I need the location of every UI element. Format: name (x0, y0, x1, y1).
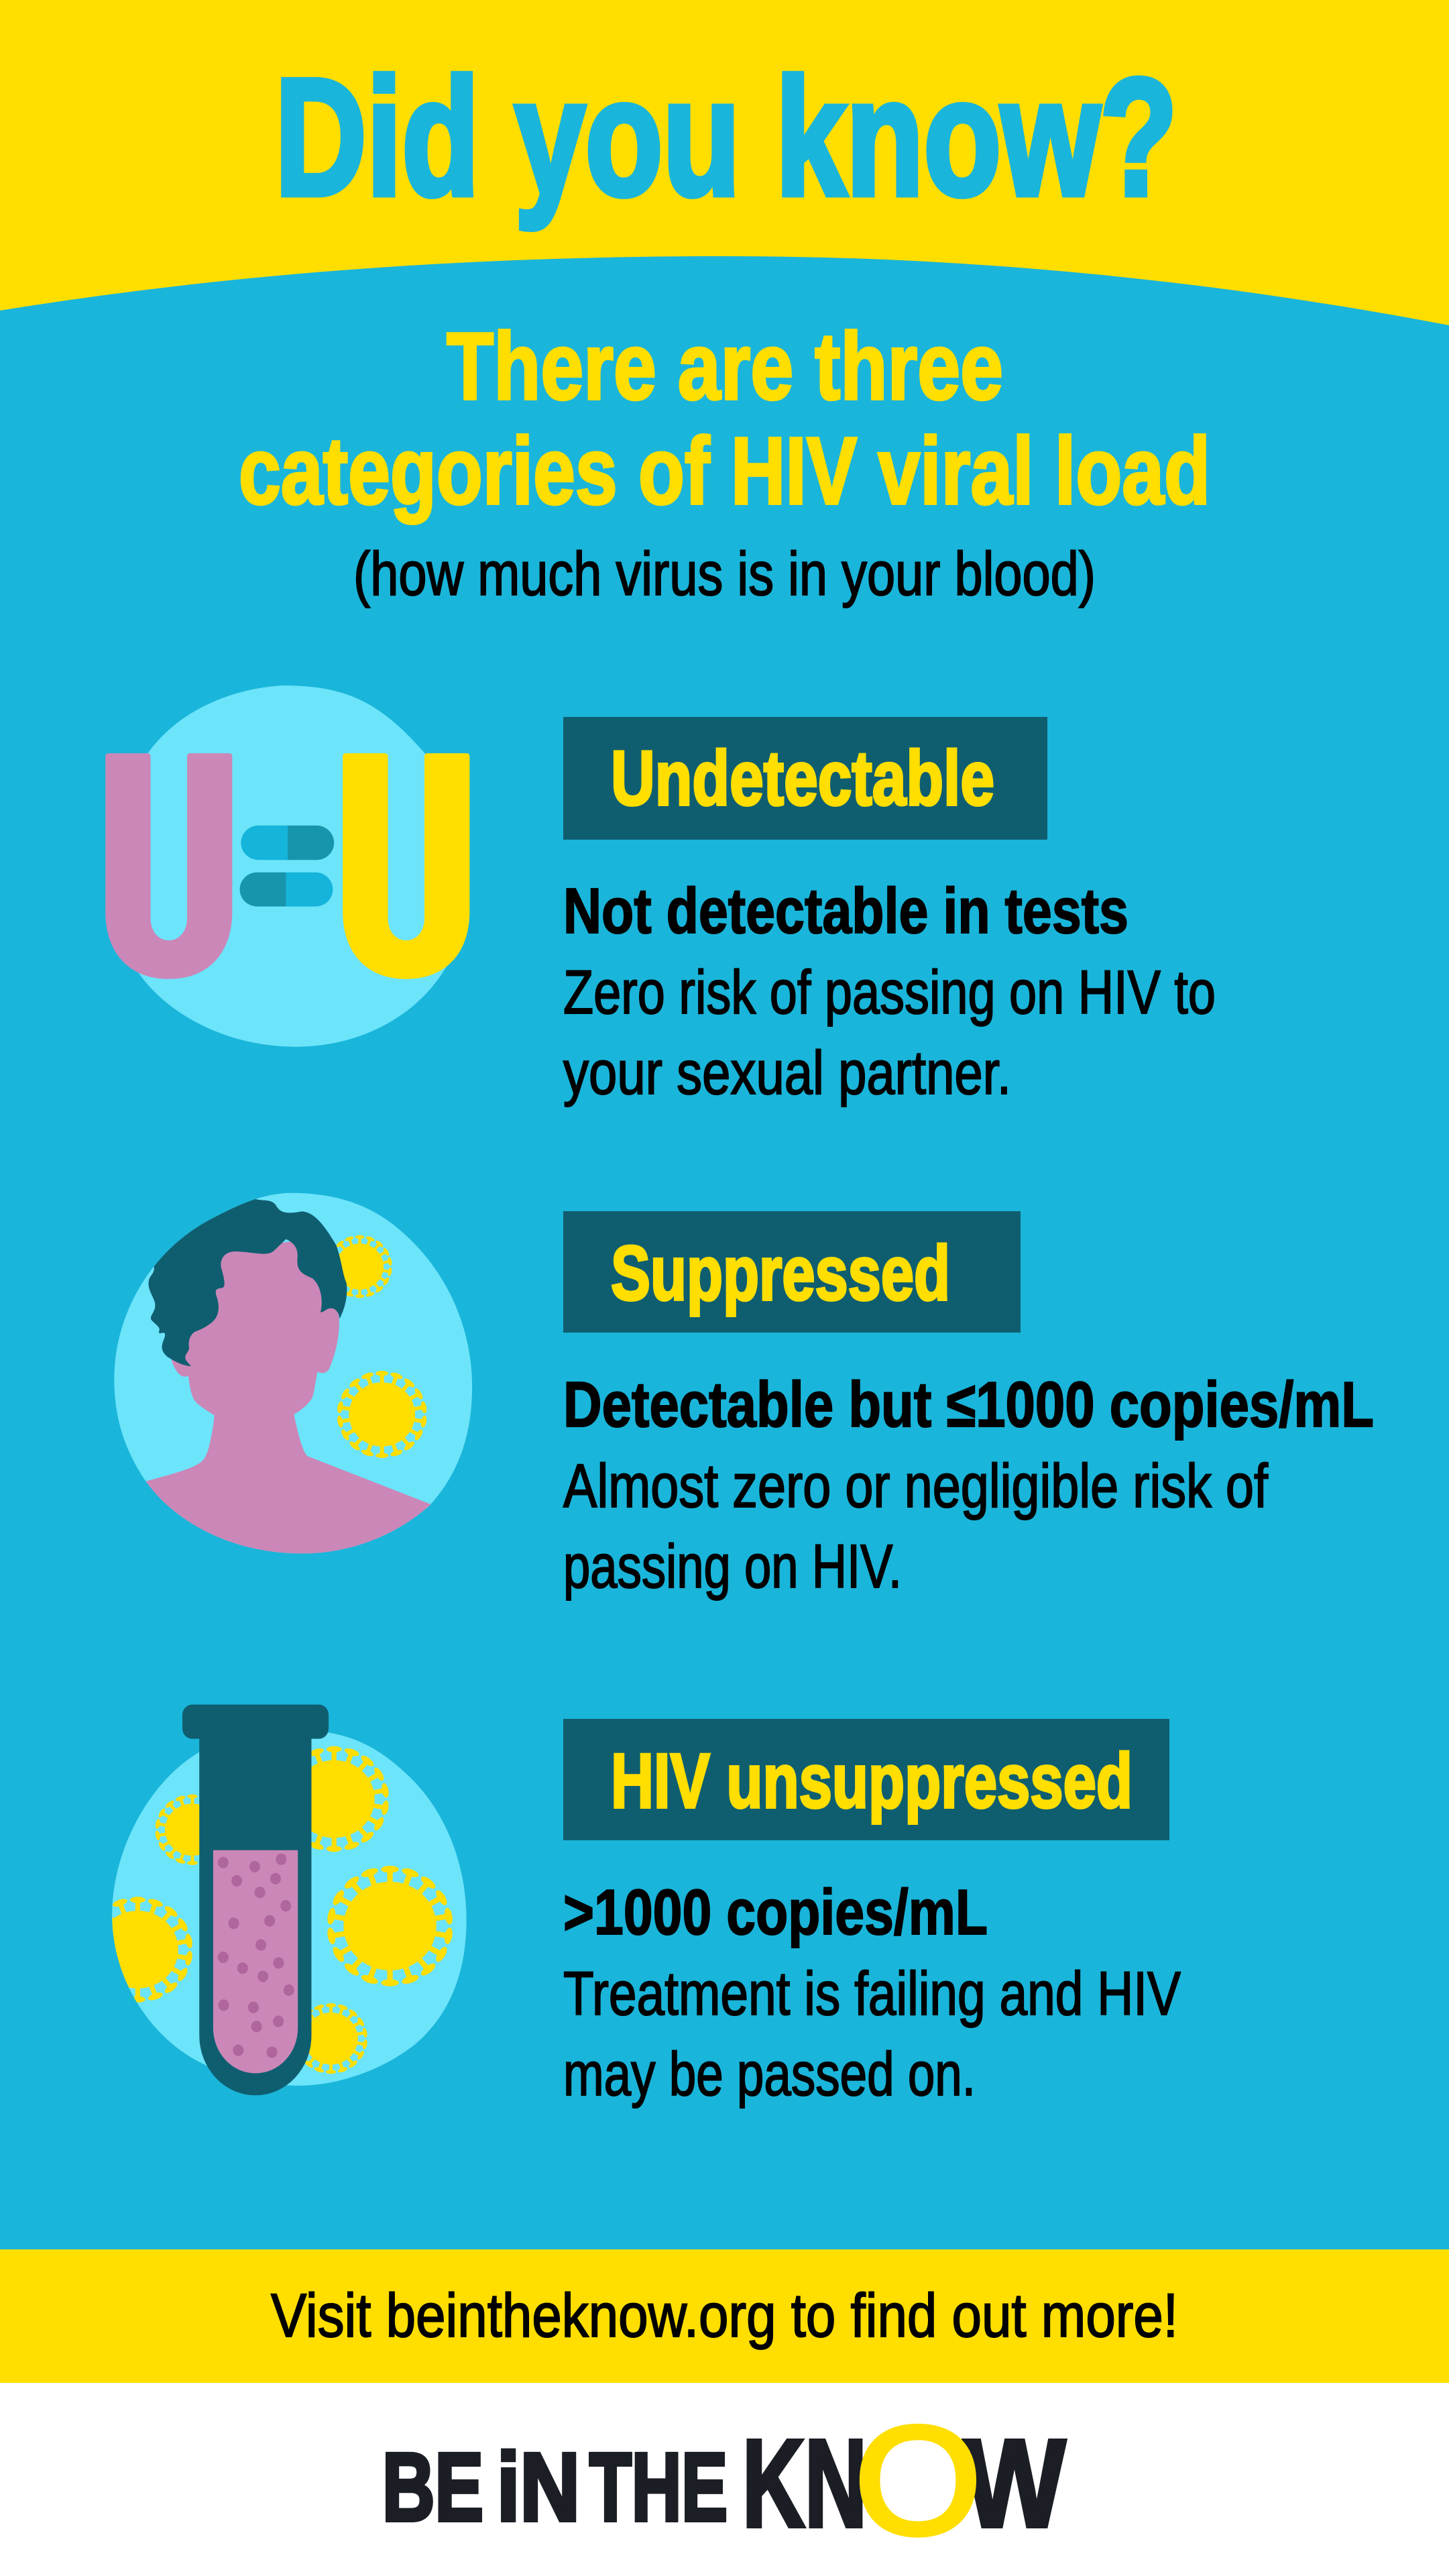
footer band with call to action: Visit beintheknow.org to find out more! (271, 2282, 1178, 2350)
logo band (0, 2383, 1449, 2576)
logo: Be in the Know: KN (742, 2414, 867, 2553)
text: Suppressed description: Almost zero or negligible risk of (563, 1452, 1268, 1520)
logo: Be in the Know: THE (589, 2433, 728, 2541)
text: HIV unsuppressed description: Treatment is failing and HIV (563, 1960, 1181, 2028)
logo: Be in the Know: W (964, 2414, 1065, 2553)
text: HIV unsuppressed description: >1000 copies/mL (563, 1877, 988, 1948)
icon: person with virus (114, 1193, 472, 1559)
icon: U=U (105, 685, 469, 1047)
logo: Be in the Know (382, 2394, 1065, 2567)
icon: test tube with virus (82, 1705, 467, 2095)
text: Undetectable description: your sexual partner. (563, 1039, 1011, 1107)
subheading: (how much virus is in your blood) (353, 540, 1096, 608)
text: Undetectable description: Zero risk of passing on HIV to (563, 958, 1216, 1027)
label box: Undetectable: Undetectable (611, 736, 994, 822)
footer band with call to action (0, 2249, 1449, 2383)
label box: Suppressed (563, 1211, 1021, 1333)
text: Suppressed description: passing on HIV. (563, 1532, 902, 1601)
title: Did you know? (275, 44, 1177, 230)
logo: Be in the Know: O (854, 2394, 982, 2567)
text: Undetectable description: Not detectable in tests (563, 875, 1128, 947)
heading: categories of HIV viral load (239, 418, 1210, 524)
logo: Be in the Know: BE (382, 2433, 483, 2541)
logo: Be in the Know: iN (497, 2433, 580, 2541)
label box: Undetectable (563, 717, 1047, 840)
text: Undetectable description (563, 875, 1216, 1107)
label box: Suppressed: Suppressed (611, 1231, 950, 1317)
header band: yellow curved top (0, 0, 1449, 325)
text: HIV unsuppressed description: may be passed on. (563, 2040, 976, 2109)
text: Suppressed description (563, 1369, 1374, 1601)
label box: HIV unsuppressed: HIV unsuppressed (611, 1738, 1133, 1824)
text: HIV unsuppressed description (563, 1877, 1181, 2109)
heading (239, 313, 1210, 524)
label box: HIV unsuppressed (563, 1719, 1169, 1840)
heading: There are three (447, 313, 1003, 420)
